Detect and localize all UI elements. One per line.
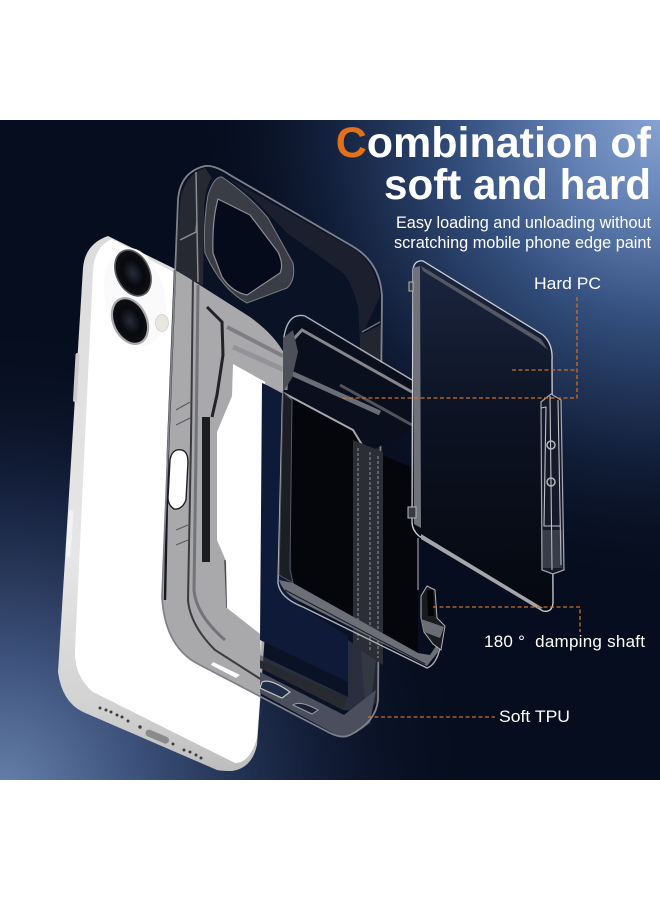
side buttons [75,355,78,400]
subtitle: Easy loading and unloading without [396,214,651,232]
infographic [0,120,660,780]
plate body [412,261,553,611]
camera cutout ring [204,177,294,303]
title: soft and hard [384,161,651,209]
subtitle [394,214,651,252]
plate left wall [413,266,421,528]
phone back glass [75,239,283,763]
case magsafe cutout [168,450,188,509]
flash [156,314,168,332]
holder outer edge [278,315,440,668]
case bottom rail over navy [260,640,376,712]
holder bottom rail [279,580,440,666]
case grey tint over phone [162,270,283,696]
photo background [0,120,660,780]
holder spine [353,440,383,665]
plate bottom wall [421,534,543,609]
subtitle: scratching mobile phone edge paint [394,234,651,252]
case outer edge [162,166,382,737]
title [336,119,652,209]
damping shaft hinge [421,586,445,650]
plate lower drop line [417,538,419,590]
phone body [58,236,285,771]
holder black panel upper [281,392,418,653]
card holder frame [233,315,440,668]
camera lens bottom [105,292,155,350]
white window showing phone [217,364,267,655]
holder left rail [279,392,293,583]
inner case rail [233,347,380,413]
label: Soft TPU: Soft TPU [499,707,570,726]
camera bump [95,242,175,352]
label: Hard PC: Hard PC [534,274,601,293]
white phone [58,236,285,771]
callout: dashed leader lines [340,297,580,717]
holder left knot [283,330,298,392]
holder top dark zone [284,317,412,453]
plate hinge bar [541,394,564,574]
camera hole [213,199,282,295]
label: damping shaft: 180 ° damping shaft [484,632,645,651]
dark rail lines over phone [165,270,175,600]
bottom speaker and port [98,706,202,760]
clear case [162,166,382,737]
hard PC plate [408,261,564,611]
plate outline [412,261,553,611]
plate top wall [421,266,548,350]
camera lens top [108,244,158,302]
case bottom dark slot [260,660,347,710]
title: Combination of [336,119,652,167]
case bottom openings [211,662,240,678]
case right wall [360,325,381,716]
case dark body [162,166,382,737]
case left top wall [175,168,212,286]
case top wall [228,178,380,340]
navy window below holder [260,383,348,682]
plate clips [408,282,416,518]
